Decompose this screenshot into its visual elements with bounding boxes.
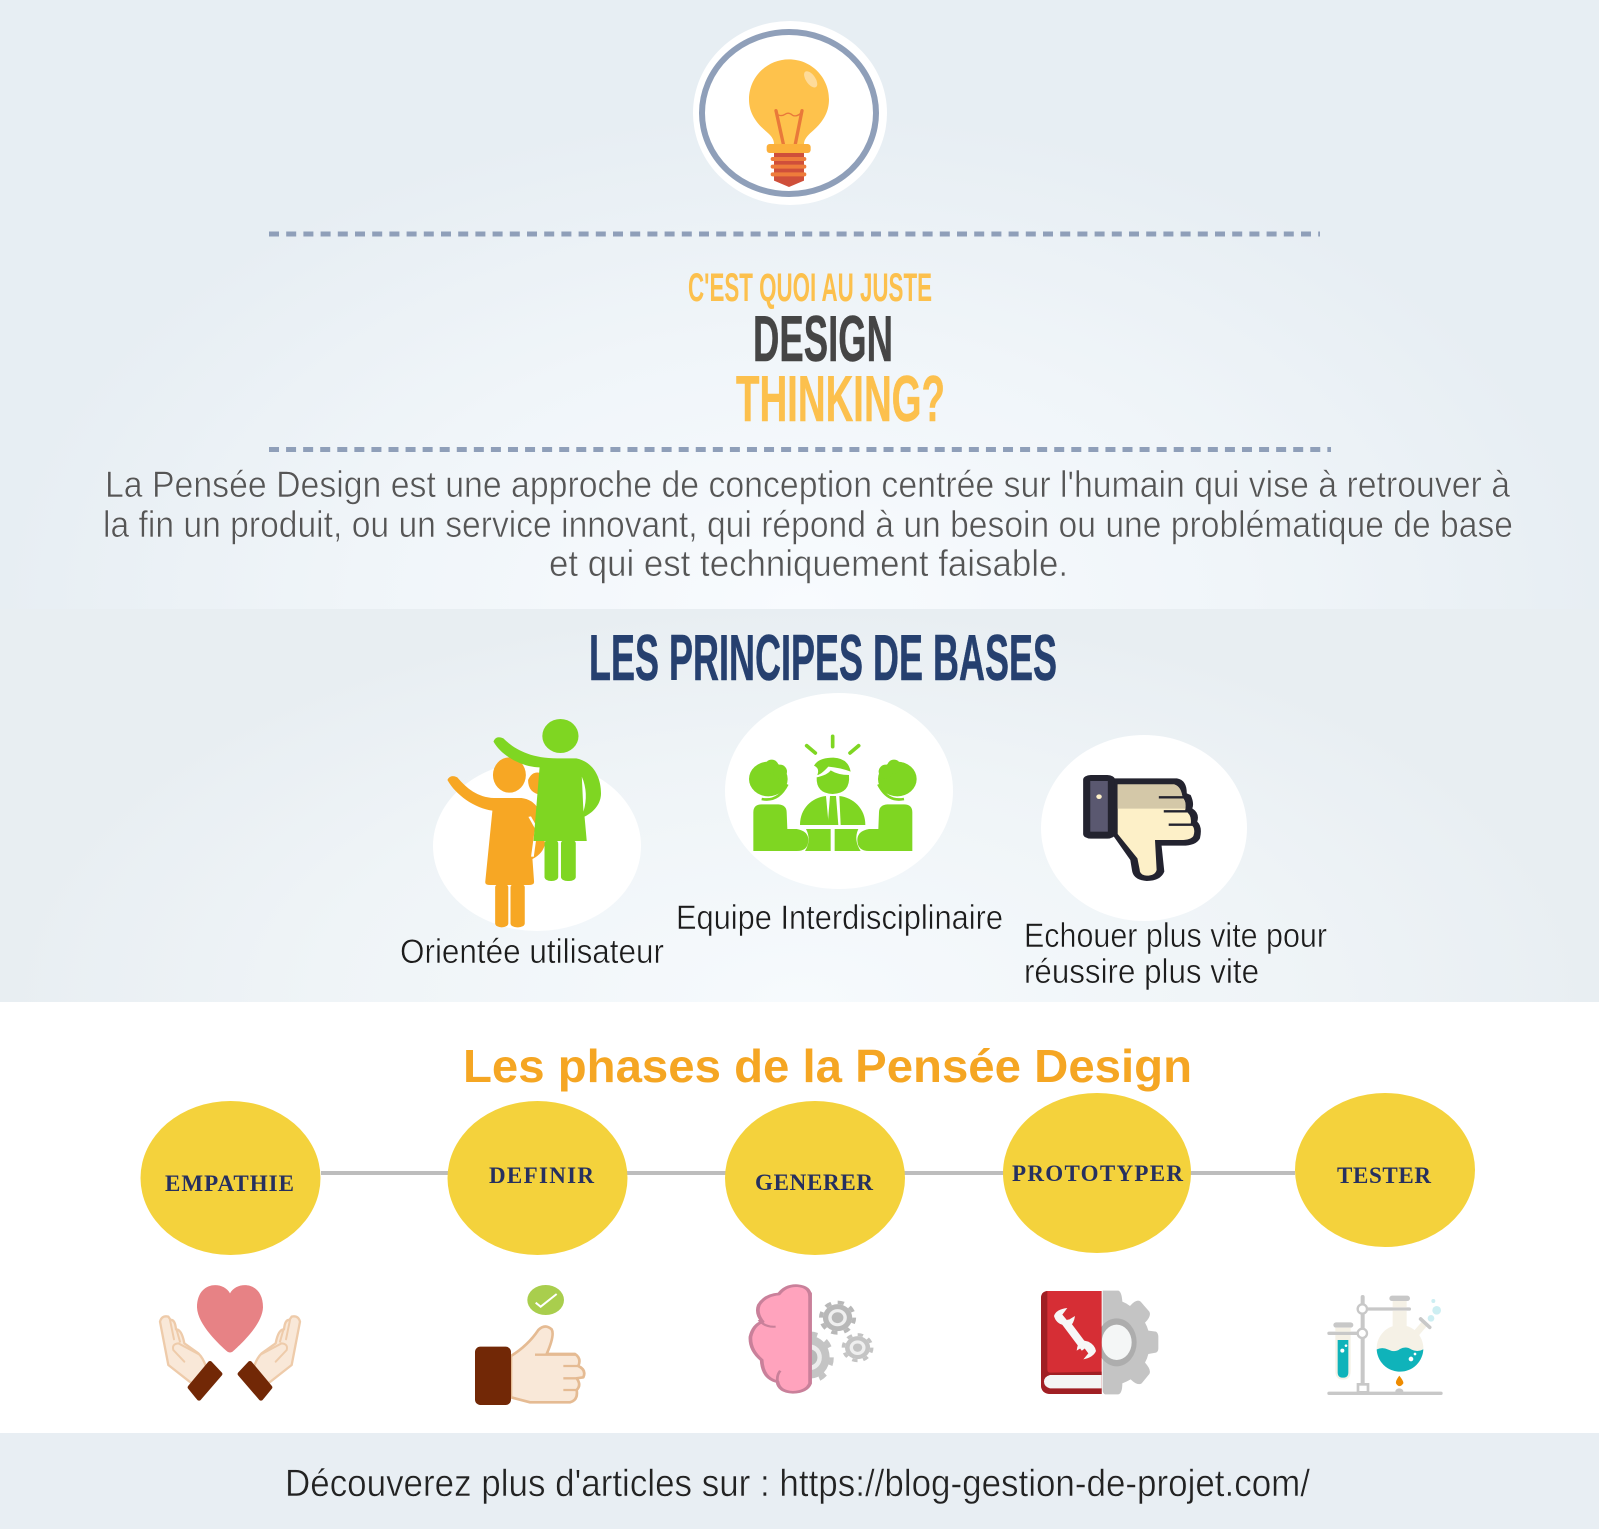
heading: c'est quoi au juste: C'EST QUOI AU JUSTE — [688, 266, 932, 310]
label: orientée utilisateur: Orientée utilisateur — [400, 933, 664, 971]
label: equipe interdisciplinaire: Equipe Interdisciplinaire — [676, 899, 1003, 937]
phase: empathie — [140, 1101, 320, 1255]
icon: light bulb in circle — [693, 21, 887, 205]
icon: book with gear and wrench — [1041, 1291, 1158, 1394]
phase: generer: GENERER — [755, 1170, 873, 1195]
label: echouer plus vite: Echouer plus vite pour — [1024, 917, 1327, 955]
heading: design: DESIGN — [753, 302, 893, 375]
phase: prototyper — [1003, 1093, 1191, 1253]
phase: empathie: EMPATHIE — [165, 1171, 294, 1196]
icon: thumbs up with check — [475, 1285, 584, 1405]
text block: definition: La Pensée Design est une approche de conception centrée sur l'humain qui vise à retrouver à — [105, 464, 1510, 505]
heading: les principes de bases: LES PRINCIPES DE BASES — [589, 621, 1057, 694]
phase: tester: TESTER — [1337, 1163, 1431, 1188]
footer text: Découverez plus d'articles sur : https://blog-gestion-de-projet.com/ — [285, 1463, 1310, 1505]
divider: top dashed line — [269, 232, 1320, 236]
divider: lower dashed line — [269, 447, 1331, 452]
icon: user oriented people — [433, 719, 641, 931]
icon: interdisciplinary team — [725, 693, 953, 889]
icon: brain with gears — [750, 1286, 872, 1392]
heading: thinking: THINKING? — [736, 362, 945, 435]
background: phases section — [0, 1002, 1599, 1433]
phase: prototyper: PROTOTYPER — [1012, 1161, 1183, 1186]
icon: lab flask and test tube — [1327, 1295, 1443, 1395]
icon: heart in hands — [160, 1285, 300, 1398]
background: principles section — [0, 609, 1599, 1002]
icon: thumbs down — [1041, 735, 1247, 921]
heading: les phases de la pensée design: Les phases de la Pensée Design — [463, 1040, 1192, 1092]
phase: tester — [1295, 1093, 1475, 1247]
label: echouer plus vite — [1024, 917, 1327, 991]
phase: definir — [448, 1101, 628, 1255]
background: footer band — [0, 1433, 1599, 1529]
connector line between phases — [321, 1171, 1295, 1175]
background: intro section — [0, 0, 1599, 609]
label: echouer plus vite: réussire plus vite — [1024, 953, 1259, 991]
text block: definition — [103, 464, 1513, 584]
phase: generer — [725, 1101, 905, 1255]
phase: definir: DEFINIR — [489, 1163, 594, 1188]
text block: definition: et qui est techniquement faisable. — [549, 543, 1068, 584]
